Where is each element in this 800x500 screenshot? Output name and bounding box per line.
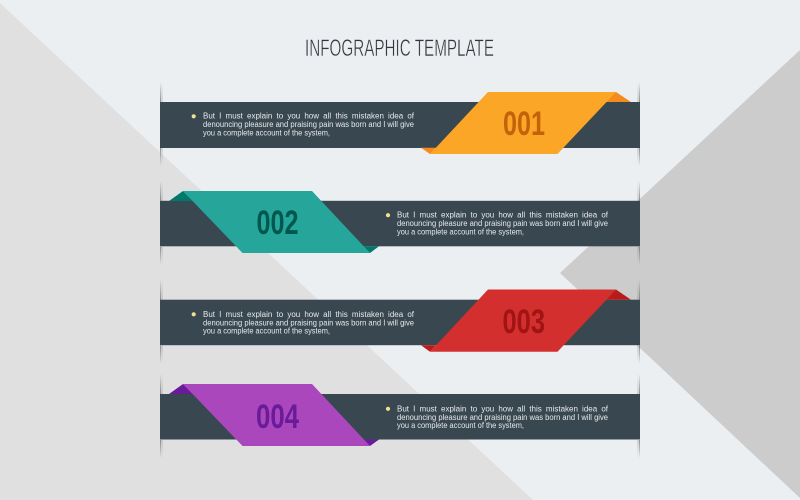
ribbon fold bottom 001 — [421, 148, 436, 154]
ribbon 001 — [430, 92, 616, 154]
bar 003 — [160, 300, 640, 345]
text 002: you a complete account of the system, — [397, 228, 524, 237]
ribbon fold bottom 002 — [363, 246, 379, 253]
text 004: But I must explain to you how all this mistaken idea of — [397, 404, 609, 413]
left grey triangle — [0, 3, 533, 500]
ribbon fold bottom 003 — [421, 345, 436, 352]
number 001: 001 — [503, 105, 545, 143]
ribbon fold bottom 004 — [363, 440, 379, 446]
number 003: 003 — [502, 303, 545, 341]
text 003: denouncing pleasure and praising pain was born and I will give — [203, 318, 415, 327]
text 001 — [203, 112, 415, 138]
text 003 — [203, 310, 415, 336]
right grey triangle — [560, 50, 800, 498]
bullet 004 — [386, 407, 390, 411]
text 003: you a complete account of the system, — [203, 327, 330, 336]
ribbon fold top 002 — [169, 191, 193, 201]
bullet 002 — [386, 213, 390, 217]
panel: 002 — [160, 181, 640, 265]
number 004: 004 — [256, 398, 299, 436]
text 002 — [397, 211, 609, 237]
ribbon fold top 001 — [605, 92, 631, 102]
bullet 001 — [192, 114, 196, 118]
text 001: denouncing pleasure and praising pain was born and I will give — [203, 120, 415, 129]
bar 001 — [160, 102, 640, 148]
panel: 001 — [160, 82, 640, 166]
panel: 004 — [160, 374, 640, 458]
number 002: 002 — [256, 204, 298, 242]
bar 002 — [160, 201, 640, 246]
text 001: But I must explain to you how all this mistaken idea of — [203, 112, 415, 121]
text 004 — [397, 404, 609, 430]
text 001: you a complete account of the system, — [203, 129, 330, 138]
text 004: you a complete account of the system, — [397, 421, 524, 430]
text 004: denouncing pleasure and praising pain was born and I will give — [397, 413, 609, 422]
bullet 003 — [192, 312, 196, 316]
text 003: But I must explain to you how all this mistaken idea of — [203, 310, 415, 319]
bar 004 — [160, 394, 640, 440]
ribbon fold top 003 — [605, 290, 631, 300]
ribbon 002 — [183, 191, 370, 253]
text 002: But I must explain to you how all this mistaken idea of — [397, 211, 609, 220]
panel: 003 — [160, 280, 640, 364]
title: INFOGRAPHIC TEMPLATE — [305, 35, 494, 62]
ribbon fold top 004 — [169, 384, 193, 394]
ribbon 004 — [183, 384, 370, 446]
ribbon 003 — [430, 290, 616, 352]
text 002: denouncing pleasure and praising pain was born and I will give — [397, 219, 609, 228]
